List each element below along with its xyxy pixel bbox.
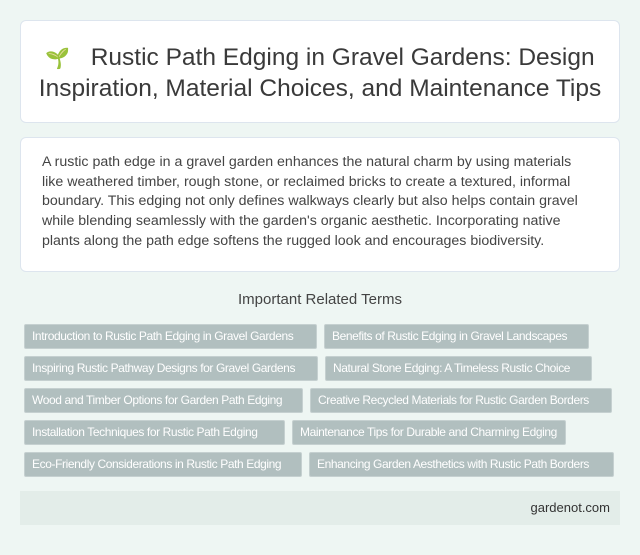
tags: Benefits of Rustic Edging in Gravel Landscapes xyxy=(332,329,567,343)
tags: Introduction to Rustic Path Edging in Gravel Gardens xyxy=(32,329,293,343)
tags: Eco-Friendly Considerations in Rustic Path Edging xyxy=(32,457,281,471)
description text: A rustic path edge in a gravel garden enhances the natural charm by using materials like weathered timber, rough stone, or reclaimed bricks to create a textured, informal boundary. This edging not only defines walkways clearly but also helps contain gravel while blending seamlessly with the garden's organic aesthetic. Incorporating native plants along the path edge softens the rugged look and encourages biodiversity. xyxy=(42,154,578,249)
tags: Natural Stone Edging: A Timeless Rustic Choice xyxy=(333,361,570,375)
title card xyxy=(20,20,620,123)
footer source: gardenot.com xyxy=(530,500,610,515)
footer xyxy=(20,491,620,525)
tags: Wood and Timber Options for Garden Path Edging xyxy=(32,393,282,407)
description card xyxy=(20,137,620,272)
title: 🌱 Rustic Path Edging in Gravel Gardens: Design Inspiration, Material Choices, and Maintenance Tips xyxy=(39,44,601,102)
tags: Maintenance Tips for Durable and Charming Edging xyxy=(300,425,557,439)
tags: Creative Recycled Materials for Rustic Garden Borders xyxy=(318,393,589,407)
tags: Inspiring Rustic Pathway Designs for Gravel Gardens xyxy=(32,361,295,375)
section heading: Important Related Terms xyxy=(238,291,402,308)
tags: Enhancing Garden Aesthetics with Rustic Path Borders xyxy=(317,457,589,471)
tags: Installation Techniques for Rustic Path Edging xyxy=(32,425,258,439)
